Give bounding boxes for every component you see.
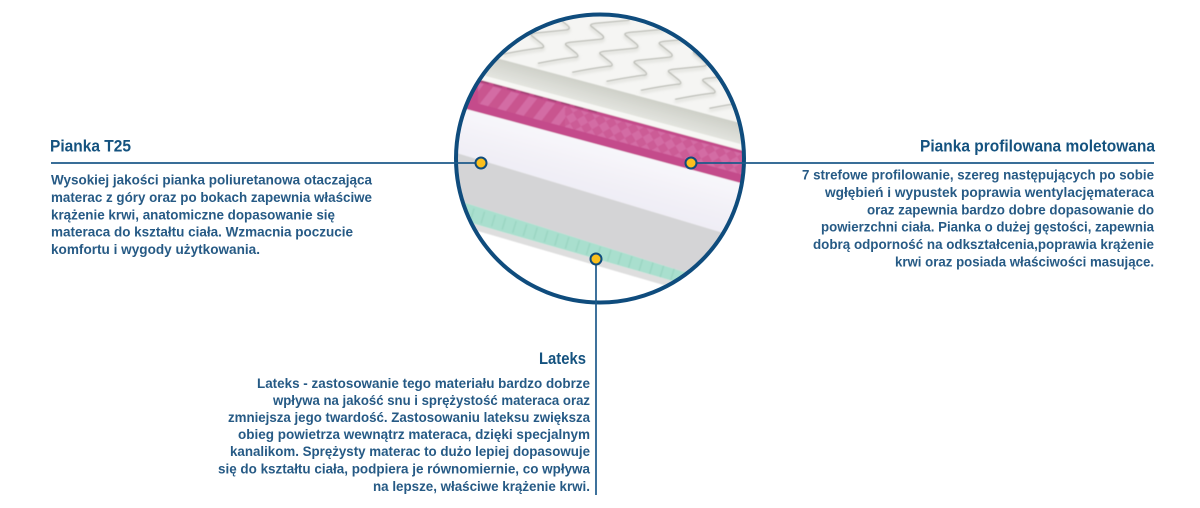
text block: Pianka T25 description: materac z góry oraz po bokach zapewnia właściwe	[51, 190, 372, 206]
leader line left	[51, 162, 481, 164]
text block: Pianka T25 description	[51, 172, 372, 258]
text block: Lateks description	[218, 376, 590, 495]
pink foam profile texture: right checks	[564, 106, 742, 174]
heading: Lateks: Lateks	[539, 350, 586, 368]
layer: quilted cover top	[500, 16, 737, 122]
latex cell divisions	[471, 209, 685, 280]
text block: Lateks description: wpływa na jakość snu i sprężystość materaca oraz	[272, 393, 590, 409]
layer: pink profiled foam	[466, 80, 742, 184]
text block: Lateks description: zmniejsza jego twardość. Zastosowaniu lateksu zwiększa	[228, 410, 590, 426]
text block: Pianka profilowana description: 7 strefowe profilowanie, szereg następujących po sobie	[802, 168, 1154, 184]
leader line down	[595, 259, 597, 495]
leader line right	[691, 162, 1154, 164]
pink foam profile texture: left bars	[478, 82, 565, 127]
text block: Pianka profilowana description: wgłębień i wypustek poprawia wentylacjęmateraca	[824, 185, 1154, 201]
layer: white stripe	[481, 76, 742, 151]
callout: Pianka T25	[50, 138, 486, 258]
layer: white T25 foam	[458, 108, 740, 232]
heading: Pianka T25: Pianka T25	[50, 138, 131, 156]
circle border	[456, 14, 744, 302]
text block: Lateks description: na lepsze, właściwe krążenie krwi.	[373, 479, 590, 495]
text block: Lateks description: kanalikom. Sprężysty materac to dużo lepiej dopasowuje	[230, 444, 590, 460]
text block: Lateks description: się do kształtu ciała, podpiera je równomiernie, co wpływa	[218, 462, 590, 478]
pink foam top shadow	[480, 81, 600, 113]
text block: Pianka profilowana description: dobrą odporność na odkształcenia,poprawia krążenie	[813, 237, 1154, 253]
text block: Pianka T25 description: materaca do kształtu ciała. Wzmacnia poczucie	[51, 224, 353, 240]
marker dot left	[476, 158, 486, 168]
layer: bottom edge	[474, 224, 672, 286]
callout: Pianka profilowana moletowana	[686, 138, 1156, 270]
heading: Pianka profilowana moletowana: Pianka profilowana moletowana	[920, 138, 1156, 156]
callout: Lateks	[218, 254, 602, 495]
text block: Pianka profilowana description: oraz zapewnia bardzo dobre dopasowanie do	[867, 202, 1154, 218]
mattress cross-section illustration	[454, 12, 746, 304]
text block: Pianka profilowana description: krwi oraz posiada właściwości masujące.	[895, 254, 1154, 270]
text block: Lateks description: obieg powietrza wewnątrz materaca, dzięki specjalnym	[238, 427, 590, 443]
marker dot right	[686, 158, 696, 168]
layer: cover side	[484, 58, 742, 144]
text block: Pianka T25 description: komfortu i wygody użytkowania.	[51, 242, 260, 258]
quilting pattern shading	[504, 22, 732, 112]
text block: Lateks description: Lateks - zastosowanie tego materiału bardzo dobrze	[257, 376, 590, 392]
layer: grey foam side	[458, 153, 722, 272]
text block: Pianka T25 description: krążenie krwi, anatomiczne dopasowanie się	[51, 208, 335, 224]
text block: Pianka T25 description: Wysokiej jakości pianka poliuretanowa otaczająca	[51, 172, 372, 188]
text block: Pianka profilowana description: powierzchni ciała. Pianka o dużej gęstości, zapewnia	[821, 220, 1154, 236]
text block: Pianka profilowana description	[802, 168, 1154, 270]
layer: green latex	[465, 202, 684, 281]
quilting pattern lines	[504, 20, 732, 110]
marker dot bottom	[590, 254, 602, 264]
